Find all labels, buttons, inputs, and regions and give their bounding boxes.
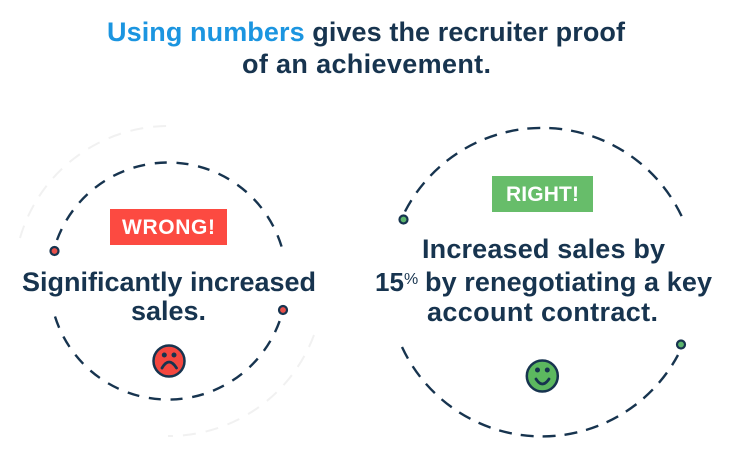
panel: right example	[375, 128, 712, 436]
statement: wrong	[22, 267, 316, 326]
icon: sad face	[154, 346, 184, 376]
statement: right: by renegotiating a key	[425, 267, 712, 297]
title: Using numbers gives the recruiter proof	[107, 17, 626, 47]
panel: wrong example	[20, 126, 316, 436]
statement: right: Increased sales by	[422, 234, 665, 264]
badge: RIGHT!: RIGHT!	[506, 183, 579, 206]
statement: right: account contract.	[427, 297, 658, 327]
statement: right	[375, 234, 712, 327]
marker dots: right	[400, 216, 685, 348]
statement: right: 15	[375, 267, 404, 297]
icon: smiley face	[527, 360, 558, 392]
marker dots: wrong	[50, 247, 287, 314]
statement: wrong: sales.	[131, 296, 206, 326]
dashed circle: right	[402, 128, 682, 436]
badge: WRONG!: WRONG!	[122, 216, 215, 239]
statement: right: %	[404, 271, 418, 288]
title: of an achievement.	[242, 49, 491, 79]
badge: WRONG!	[110, 209, 227, 245]
title	[107, 17, 626, 79]
statement: wrong: Significantly increased	[22, 267, 316, 297]
faint decorative arcs	[20, 126, 314, 436]
dashed circle: wrong	[55, 162, 282, 400]
badge: RIGHT!	[492, 176, 593, 212]
